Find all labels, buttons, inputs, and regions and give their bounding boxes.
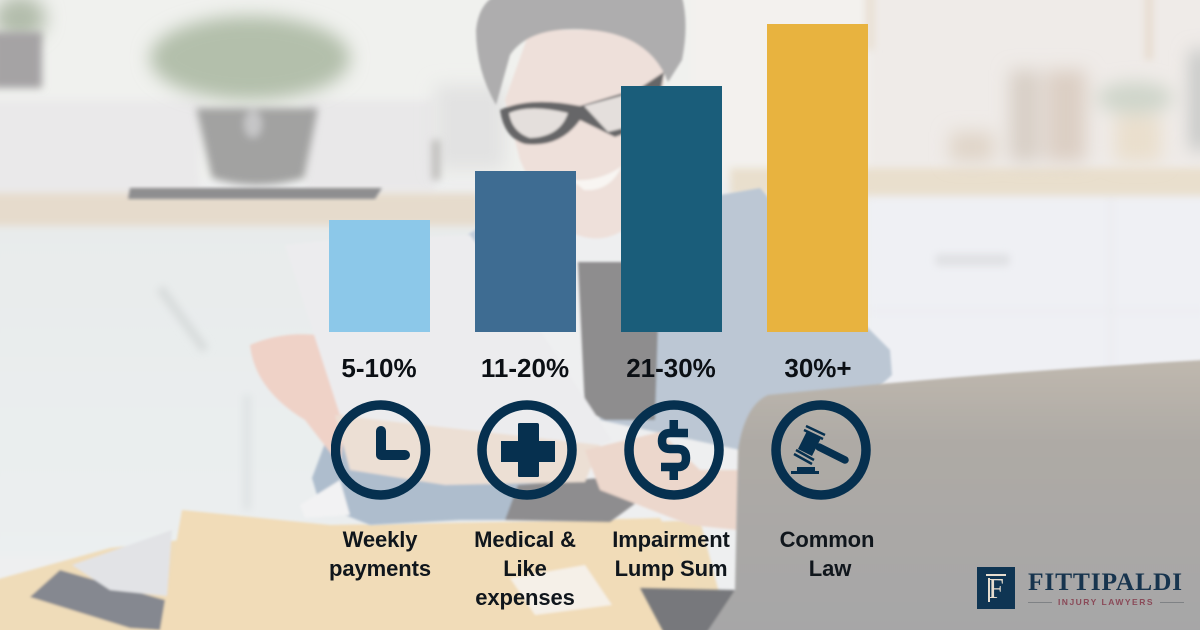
percentage label: 21-30%: 21-30% — [626, 353, 716, 383]
bar: 30%+ — [767, 24, 868, 332]
percentage label: 30%+: 30%+ — [784, 353, 852, 383]
caption: Impairment Lump Sum: Lump Sum — [615, 556, 727, 581]
laptop — [640, 360, 1200, 630]
table and folder — [0, 495, 1200, 630]
icon: medical cross — [477, 400, 577, 500]
caption: Common Law: Common — [780, 527, 874, 552]
caption: Medical & Like expenses — [474, 527, 576, 610]
percentage label: 11-20%: 11-20% — [481, 353, 569, 383]
caption: Medical & Like expenses: expenses — [475, 585, 575, 610]
caption: Common Law: Law — [809, 556, 851, 581]
bar: 21-30% — [621, 86, 722, 332]
caption: Weekly payments — [329, 527, 431, 581]
percentage label: 5-10%: 5-10% — [341, 353, 417, 383]
logo wordmark: FITTIPALDI — [1028, 567, 1183, 596]
caption: Impairment Lump Sum: Impairment — [612, 527, 730, 552]
caption: Weekly payments: payments — [329, 556, 431, 581]
logo mark — [977, 567, 1015, 609]
logo: Fittipaldi Injury Lawyers — [977, 567, 1184, 609]
bar: 11-20% — [475, 171, 576, 332]
caption: Medical & Like expenses: Like — [503, 556, 547, 581]
icon: clock — [331, 400, 430, 500]
caption: Medical & Like expenses: Medical & — [474, 527, 576, 552]
caption: Common Law — [780, 527, 874, 581]
caption: Impairment Lump Sum — [612, 527, 730, 581]
bar: 5-10% — [329, 220, 430, 332]
logo tagline: INJURY LAWYERS — [1058, 597, 1154, 607]
caption: Weekly payments: Weekly — [343, 527, 417, 552]
icon: gavel — [771, 400, 871, 500]
woman — [250, 0, 892, 530]
bar chart — [329, 24, 868, 332]
icon: dollar sign — [624, 400, 724, 500]
logo mark: F — [988, 574, 1004, 605]
